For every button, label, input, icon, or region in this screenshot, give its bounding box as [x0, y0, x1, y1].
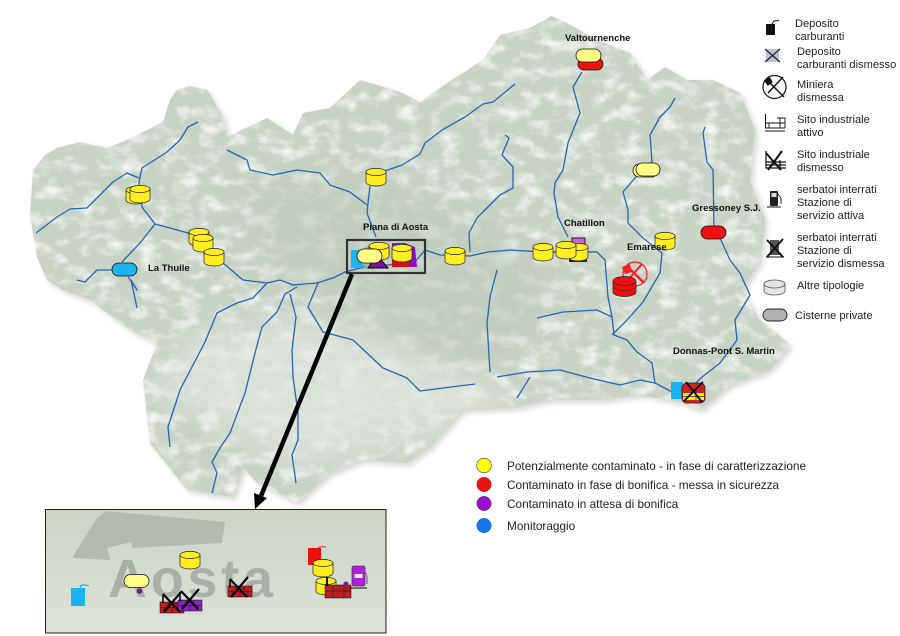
inset: yellow cylinder: [180, 551, 200, 569]
label: deposito carburanti dismesso: carburanti dismesso: [797, 59, 896, 71]
inset: Aosta detail: [46, 510, 386, 633]
inset: dismissed red industrial site: [228, 577, 252, 597]
label: deposito carburanti: carburanti: [795, 31, 844, 43]
inset: blue canister: [71, 585, 89, 606]
site markers: Emarese mine and red cylinder: [613, 262, 647, 297]
highlighted area: Piana di Aosta: [347, 240, 425, 273]
icon: other types: [764, 280, 785, 295]
place labels: Piana di Aosta: [363, 222, 429, 233]
site marker: La Thuile capsule: [112, 263, 137, 276]
legend: status: [477, 458, 806, 533]
place labels: Gressoney S.J.: [692, 203, 761, 214]
status: potentially contaminated: Potenzialmente contaminato - in fase di caratterizzazione: [507, 459, 806, 473]
label: active underground tanks: serbatoi interrati: [797, 184, 877, 196]
inset: capsule with purple dot: [124, 574, 149, 594]
rivers: [36, 72, 750, 493]
site markers: Chatillon: [556, 238, 588, 262]
icon: private tanks: [763, 309, 787, 321]
label: active underground tanks: servizio attiva: [797, 210, 865, 222]
label: altre tipologie: Altre tipologie: [797, 280, 864, 292]
site markers: Valdigne cylinders: [126, 168, 553, 266]
inset: purple fuel pump: [350, 566, 367, 588]
place labels: La Thuile: [148, 263, 190, 274]
inset: dismissed industrial sites: [160, 589, 202, 613]
site marker: Emarese cylinder upper: [655, 232, 675, 250]
inset: red industrial site: [325, 577, 351, 598]
icon: fuel depot: [766, 20, 779, 35]
map: Valle d'Aosta region: [0, 0, 800, 520]
label: sito industriale attivo: Sito industriale: [797, 114, 870, 126]
place labels: Valtournenche: [565, 33, 630, 44]
legend: site types: [763, 18, 896, 322]
site marker: Gressoney capsule: [701, 226, 726, 239]
icon: dismissed fuel depot: [765, 49, 780, 62]
inset: red canister: [308, 547, 326, 565]
site markers: Donnas-Pont S. Martin: [671, 382, 705, 403]
site marker: Ayas capsule: [633, 163, 660, 177]
label: sito industriale attivo: attivo: [797, 127, 824, 139]
place labels: Donnas-Pont S. Martin: [673, 346, 775, 357]
label: deposito carburanti: Deposito: [795, 18, 839, 30]
inset: grey urban shape: [72, 511, 225, 560]
icon: dismissed mine: [763, 76, 786, 98]
label: cisterne private: Cisterne private: [795, 310, 873, 322]
status: contaminated, remediation: Contaminato in fase di bonifica - messa in sicurezza: [507, 478, 780, 492]
icon: active service station: [767, 191, 781, 207]
inset: Aosta label: Aosta: [108, 549, 274, 609]
label: deposito carburanti dismesso: Deposito: [797, 46, 841, 58]
label: miniera dismessa: Miniera: [797, 79, 833, 91]
label: active underground tanks: Stazione di: [797, 197, 852, 209]
status: monitoring: [477, 518, 576, 533]
place labels: Chatillon: [564, 218, 605, 229]
icon: dismissed industrial site: [766, 151, 786, 170]
inset: yellow cylinders: [313, 559, 336, 595]
label: miniera dismessa: dismessa: [797, 92, 845, 104]
status: awaiting remediation: Contaminato in attesa di bonifica: [507, 497, 679, 511]
label: dismissed underground tanks: servizio dismessa: [797, 258, 885, 270]
label: dismissed underground tanks: Stazione di: [797, 245, 852, 257]
place labels: Emarese: [627, 242, 667, 253]
site markers: Valtournenche: [576, 49, 603, 70]
icon: active industrial site: [765, 114, 785, 131]
label: sito industriale dismesso: dismesso: [797, 162, 844, 174]
icon: dismissed service station: [766, 239, 784, 257]
arrow to inset: [254, 274, 352, 509]
status: monitoring: Monitoraggio: [507, 519, 576, 533]
label: sito industriale dismesso: Sito industriale: [797, 149, 870, 161]
place labels: [148, 33, 775, 357]
label: dismissed underground tanks: serbatoi interrati: [797, 232, 877, 244]
